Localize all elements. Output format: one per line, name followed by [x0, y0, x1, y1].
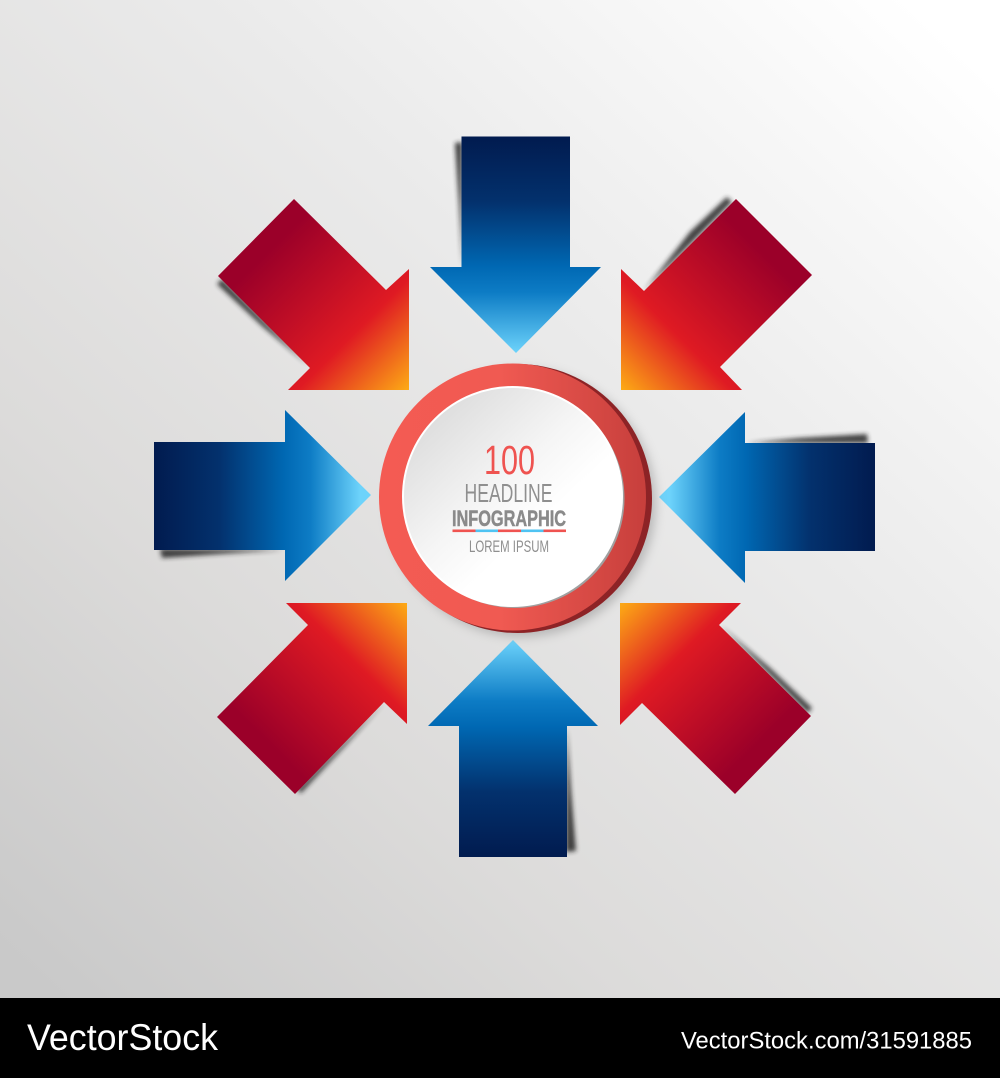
red and blue divider: [452, 530, 566, 532]
footer url: VectorStock.com/31591885: [681, 1028, 972, 1054]
number 100: 100: [484, 437, 535, 483]
arrow: bottom right, pointing up left: [620, 603, 812, 794]
infographic label: INFOGRAPHIC: [452, 506, 566, 531]
footer brand: VectorStock: [27, 1017, 218, 1058]
arrow: top, pointing down: [430, 136, 601, 353]
lorem ipsum: LOREM IPSUM: [469, 537, 549, 556]
headline: HEADLINE: [464, 478, 552, 508]
footer bar: [0, 998, 1000, 1078]
badge drop shadow: [388, 369, 656, 637]
badge dark rim: [383, 364, 652, 633]
inner white plate: [403, 387, 622, 606]
arrow: top right, pointing down left: [621, 197, 812, 390]
arrow: left, pointing right: [154, 410, 371, 581]
inner plate shadow: [406, 389, 624, 608]
central circle badge: [379, 364, 656, 637]
arrow: right, pointing left: [659, 412, 875, 583]
arrow: bottom left, pointing up right: [217, 603, 407, 794]
badge red ring: [379, 364, 646, 630]
arrow: bottom, pointing up: [428, 640, 598, 857]
arrow: top left, pointing down right: [217, 199, 409, 390]
